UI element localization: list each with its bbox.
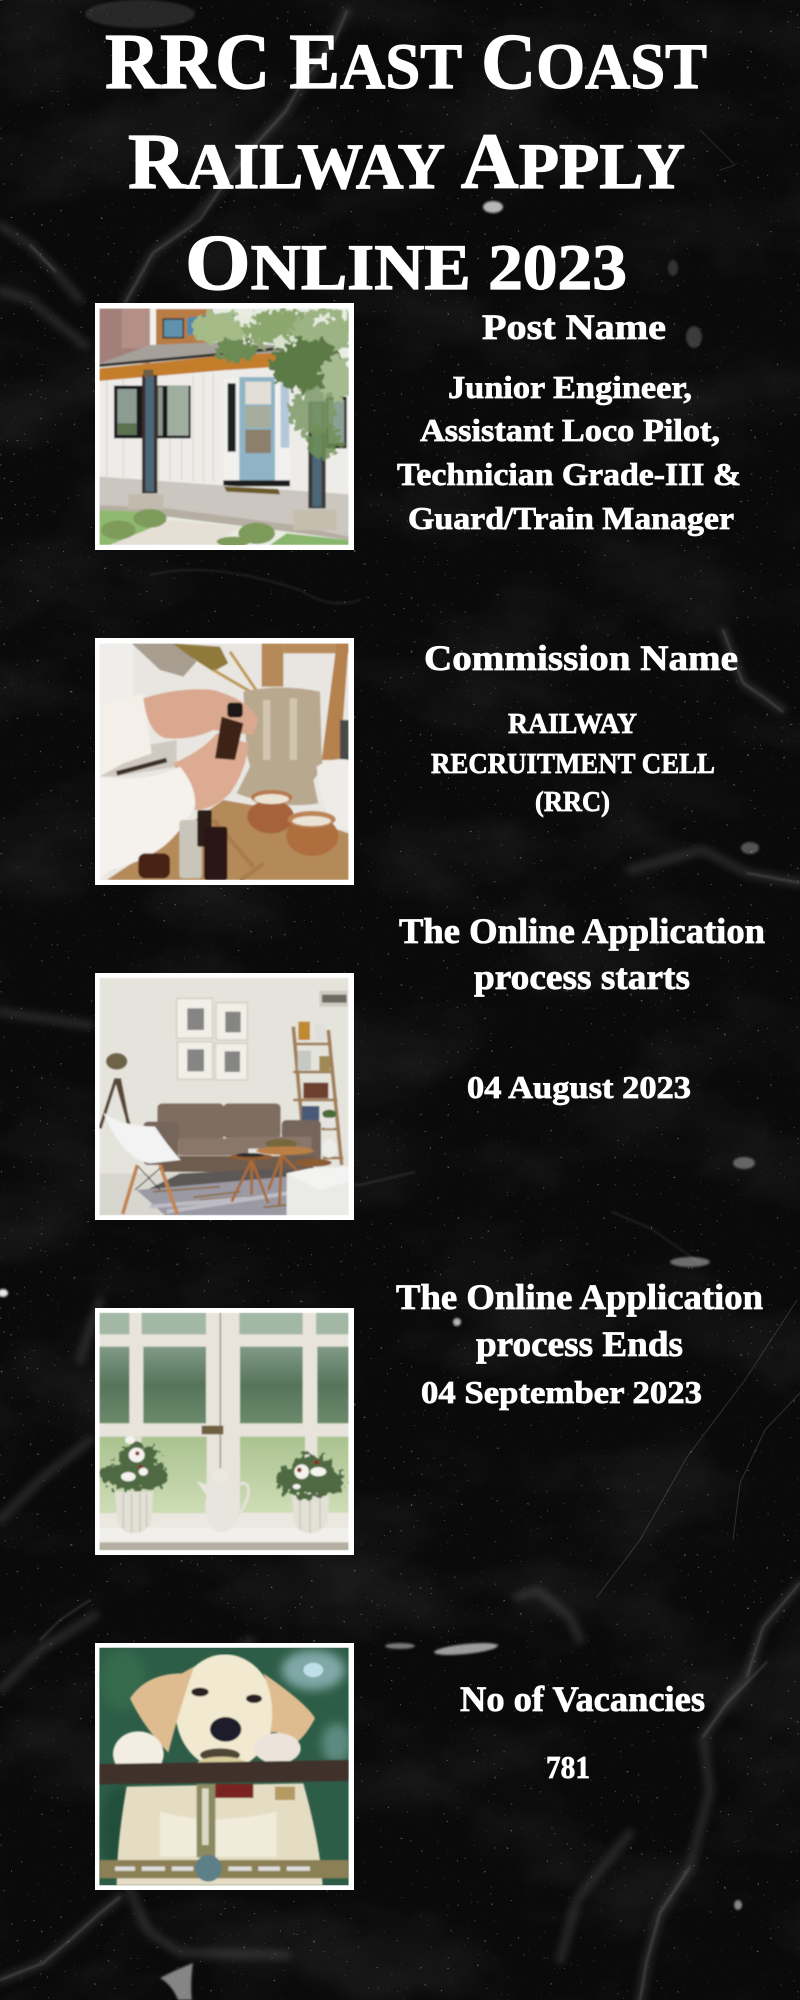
text: post names list: Technician Grade-III & <box>397 456 741 492</box>
photo 3: living room <box>95 973 354 1220</box>
text: recruitment cell: (RRC) <box>535 786 610 818</box>
text: end date: 04 September 2023 <box>421 1374 702 1410</box>
text: start date: 04 August 2023 <box>467 1069 691 1105</box>
photo 5: labrador puppy <box>95 1643 354 1890</box>
photo 4: window with flowers <box>95 1308 354 1555</box>
text: post names list: Assistant Loco Pilot, <box>420 412 720 448</box>
title line 3: ONLINE 2023 <box>185 220 627 307</box>
photo 1: house porch <box>95 303 354 550</box>
heading: commission name: Commission Name <box>424 638 738 678</box>
text: post names list: Junior Engineer, <box>448 369 692 405</box>
heading: application ends <box>396 1277 763 1364</box>
text: post names list: Guard/Train Manager <box>408 500 734 536</box>
text: post names list <box>397 369 741 536</box>
heading: number of vacancies: No of Vacancies <box>460 1679 705 1719</box>
title line 2: RAILWAY APPLY <box>128 119 685 206</box>
text: recruitment cell <box>431 708 715 818</box>
heading: application ends: process Ends <box>476 1324 683 1364</box>
heading: application starts: The Online Application <box>399 911 765 951</box>
title <box>105 19 707 307</box>
title line 1: RRC EAST COAST <box>105 19 707 106</box>
text: vacancy count: 781 <box>546 1749 590 1785</box>
heading: application starts <box>399 911 765 997</box>
heading: application starts: process starts <box>474 957 690 997</box>
photo 2: hands with bottle <box>95 638 354 885</box>
text: recruitment cell: RAILWAY <box>508 708 637 740</box>
text: recruitment cell: RECRUITMENT CELL <box>431 748 715 780</box>
heading: application ends: The Online Application <box>396 1277 763 1317</box>
heading: post name: Post Name <box>482 307 666 347</box>
